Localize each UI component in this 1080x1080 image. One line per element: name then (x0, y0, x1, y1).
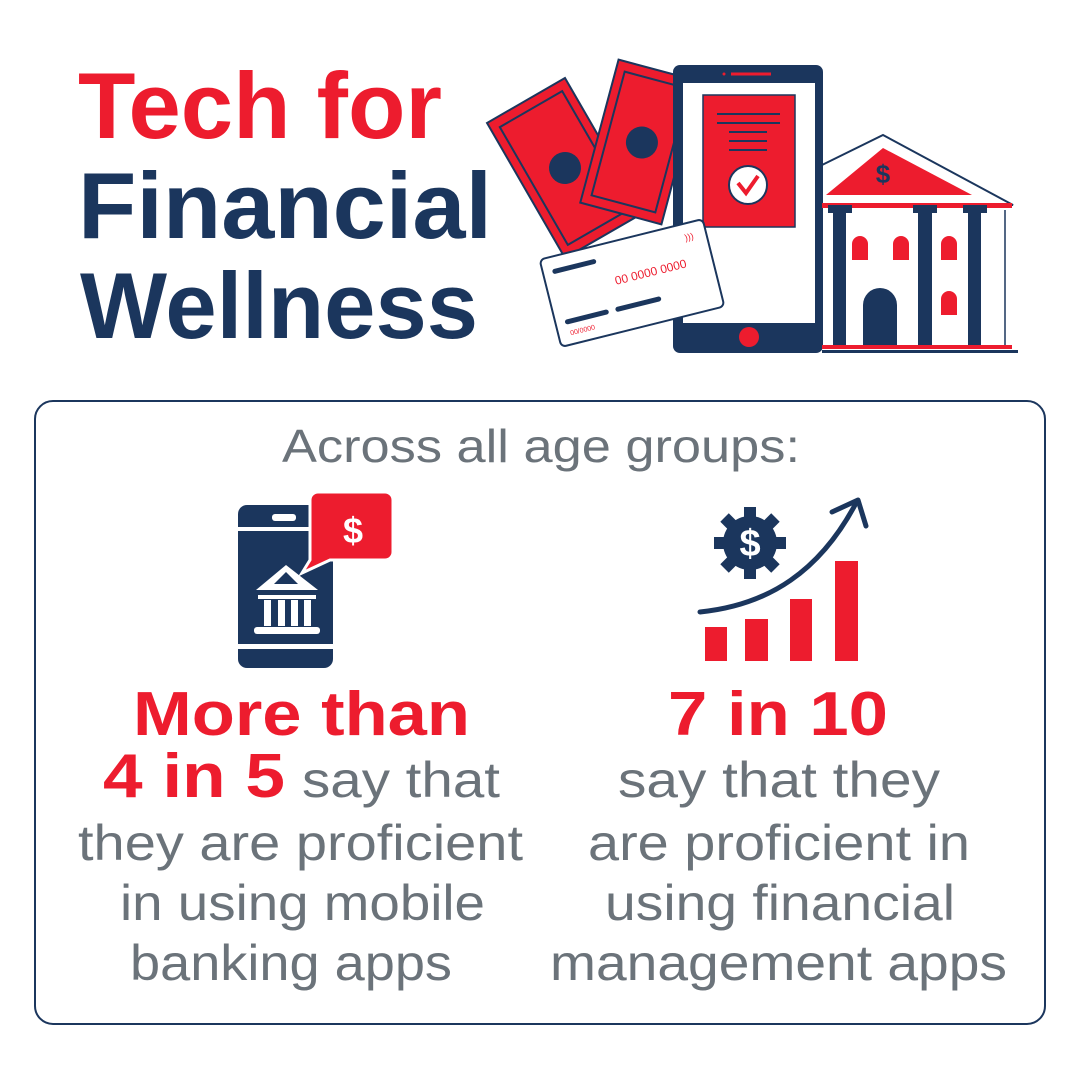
text block: mobile banking stat: More than (133, 680, 470, 749)
title: Financial (78, 153, 492, 258)
icon: credit card: ))) (683, 231, 695, 243)
icon: phone (673, 65, 823, 353)
panel: stats box (35, 401, 1045, 1024)
text block: mobile banking stat: banking apps (130, 935, 452, 991)
text block: mobile banking stat: in using mobile (120, 875, 485, 931)
icon: financial growth chart: $ (739, 523, 761, 565)
icon: mobile banking (238, 492, 393, 668)
icon: credit card: 00 0000 0000 (613, 256, 688, 288)
icon: bank building: $ (876, 159, 891, 189)
text block: financial apps stat: are proficient in (588, 815, 970, 871)
text block: financial apps stat: 7 in 10 (668, 680, 888, 749)
icon: bank building (822, 135, 1018, 353)
text block: financial apps stat: say that they (618, 752, 940, 808)
text block: financial apps stat: using financial (605, 875, 955, 931)
text block: financial apps stat (550, 680, 1007, 991)
heading: across all age groups: Across all age groups: (282, 420, 800, 472)
text block: financial apps stat: management apps (550, 935, 1007, 991)
icon: financial growth chart (700, 500, 866, 661)
icon: credit card: 00/0000 (570, 324, 596, 337)
icon: mobile banking: $ (343, 510, 363, 551)
text block: mobile banking stat: 4 in 5 (103, 742, 285, 811)
text block: mobile banking stat: they are proficient (78, 815, 523, 871)
title (78, 53, 492, 358)
illustration: money, card, phone, bank (487, 60, 1018, 353)
text block: mobile banking stat (78, 680, 523, 991)
title: Tech for (78, 53, 442, 158)
text block: mobile banking stat: say that (302, 752, 500, 808)
icon: bill 2 (580, 60, 700, 224)
title: Wellness (80, 253, 478, 358)
icon: credit card (540, 219, 724, 347)
icon: bill 1 (487, 78, 643, 258)
